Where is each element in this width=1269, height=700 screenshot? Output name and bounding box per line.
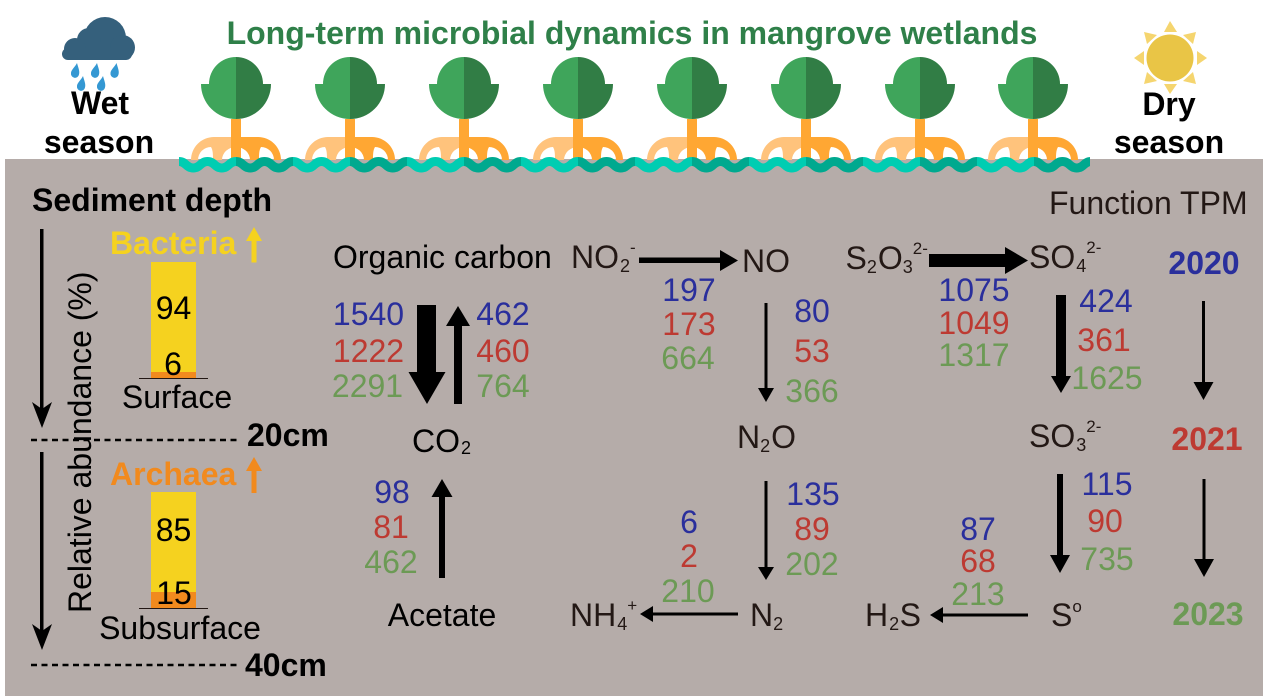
values: S0 to H2S: 213 [951, 576, 1005, 612]
stacked bar: subsurface: Subsurface [99, 610, 261, 646]
label: S2O3 2-: S [846, 240, 867, 276]
label: H2S: 2 [889, 614, 899, 634]
stacked bar: surface [122, 262, 232, 415]
label: S0: o [1072, 597, 1082, 616]
values: CO2 to organic carbon: 764 [476, 368, 530, 404]
label: N2: 2 [773, 614, 783, 634]
panel: sediment background [5, 159, 1263, 696]
label: SO3 2-: 2- [1086, 417, 1101, 436]
label: wet season [44, 85, 154, 160]
label: CO2: CO [412, 423, 460, 459]
values: CO2 to organic carbon: 462 [476, 296, 530, 332]
values: SO3 to S0: 115 [1081, 466, 1133, 502]
values: N2 to NH4+: 6 [680, 504, 698, 540]
nitrogen pathway [570, 238, 840, 634]
icon: sun [1134, 21, 1207, 94]
values: NO2- to NO: 173 [662, 306, 716, 342]
label: NH4+: NH [570, 597, 616, 633]
label: NO: NO [742, 243, 790, 279]
label: S0: S [1051, 597, 1072, 633]
values: SO4 to SO3: 1625 [1071, 360, 1143, 396]
label: SO3 2-: 3 [1076, 435, 1086, 455]
values: S2O3 to SO4 [938, 272, 1010, 373]
stacked bar: subsurface [99, 492, 261, 646]
legend: years timeline [1168, 245, 1244, 632]
arrow: NO2- to NO [639, 250, 738, 271]
values: organic carbon to CO2 [332, 296, 404, 404]
label: NH4+: 4 [617, 614, 627, 634]
label: S2O3 2-: 3 [903, 257, 913, 277]
stacked bar: subsurface: 15 [156, 575, 192, 611]
heading: function TPM: Function TPM [1049, 185, 1248, 221]
arrow: CO2 to organic carbon [446, 306, 470, 404]
label: N2O: O [771, 419, 796, 455]
label: H2S: H [865, 597, 888, 633]
label: SO3 2-: SO [1029, 418, 1075, 454]
values: N2O to N2: 89 [794, 511, 830, 547]
values: N2 to NH4+: 210 [661, 573, 715, 609]
year 2023: 2023 [1172, 596, 1244, 632]
values: SO4 to SO3: 424 [1079, 283, 1133, 319]
values: organic carbon to CO2: 1540 [333, 296, 404, 332]
label: dry season: Dry [1142, 86, 1196, 122]
values: acetate to CO2: 81 [373, 509, 409, 545]
values: organic carbon to CO2: 1222 [333, 333, 404, 369]
arrow: S0 to H2S [930, 607, 1028, 623]
values: SO4 to SO3: 361 [1077, 322, 1131, 358]
values: S0 to H2S: 87 [960, 511, 996, 547]
title: Long-term microbial dynamics in mangrove wetlands [227, 15, 1037, 51]
icon: rain cloud [62, 17, 135, 91]
values: S2O3 to SO4: 1075 [938, 272, 1010, 308]
label: organic carbon: Organic carbon [333, 239, 552, 275]
values: SO3 to S0: 735 [1080, 541, 1134, 577]
label: N2: N [750, 597, 773, 633]
carbon pathway [332, 239, 552, 633]
values: NO to N2O: 53 [794, 333, 830, 369]
arrow: N2O to N2 [758, 481, 774, 580]
arrow: S2O3 to SO4 [929, 247, 1028, 274]
values: N2O to N2: 135 [786, 476, 840, 512]
label: SO4 2-: 4 [1076, 256, 1086, 276]
arrow: N2 to NH4+ [640, 606, 738, 622]
label: archaea with up arrow: Archaea [110, 456, 236, 492]
values: NO to N2O [785, 293, 839, 409]
stacked bar: surface: 6 [164, 346, 182, 382]
values: S2O3 to SO4: 1317 [938, 337, 1010, 373]
label: 40cm: 40cm [245, 647, 327, 683]
arrow: depth to 40cm [32, 452, 52, 650]
label: S2O3 2-: 2- [913, 239, 928, 258]
values: NO2- to NO: 197 [662, 272, 716, 308]
stacked bar: surface: 94 [156, 290, 191, 326]
axis label: relative abundance: Relative abundance (%) [62, 271, 98, 613]
label: SO4 2-: 2- [1086, 238, 1101, 257]
values: CO2 to organic carbon [476, 296, 530, 404]
arrow: SO3 to S0 [1050, 474, 1070, 573]
values: CO2 to organic carbon: 460 [476, 333, 530, 369]
label: SO4 2-: SO [1029, 239, 1075, 275]
values: SO3 to S0 [1080, 466, 1134, 577]
water waves [179, 155, 1090, 174]
label: H2S: S [900, 597, 921, 633]
arrow: 2021 to 2023 [1194, 479, 1214, 577]
values: N2 to NH4+: 2 [680, 538, 698, 574]
label: NO2-: NO [571, 239, 619, 275]
label: S2O3 2-: 2 [867, 257, 877, 277]
label: wet season: season [44, 124, 154, 160]
label: acetate: Acetate [388, 597, 496, 633]
label: dry season: season [1114, 124, 1224, 160]
arrow: organic carbon to CO2 [408, 305, 446, 404]
arrow: depth to 20cm [32, 229, 52, 428]
dashed line: 20cm [31, 439, 240, 441]
label: N2O: 2 [760, 436, 770, 456]
values: organic carbon to CO2: 2291 [332, 368, 403, 404]
values: NO2- to NO: 664 [661, 340, 715, 376]
arrow: acetate to CO2 [432, 479, 452, 578]
heading: sediment depth: Sediment depth [32, 182, 272, 218]
label: NO2-: 2 [620, 256, 630, 276]
sulfur pathway [846, 238, 1143, 634]
values: NO to N2O: 80 [794, 293, 830, 329]
arrow: SO4 to SO3 [1051, 295, 1071, 393]
year 2020: 2020 [1168, 245, 1240, 281]
label: dry season [1114, 86, 1224, 160]
label: NO2-: - [630, 238, 636, 257]
values: SO4 to SO3 [1071, 283, 1143, 396]
values: NO to N2O: 366 [785, 373, 839, 409]
values: S0 to H2S: 68 [960, 543, 996, 579]
values: N2 to NH4+ [661, 504, 715, 609]
label: N2O: N [737, 419, 760, 455]
values: acetate to CO2: 462 [364, 544, 418, 580]
stacked bar: subsurface: 85 [156, 512, 191, 548]
values: N2O to N2: 202 [785, 546, 839, 582]
label: 20cm: 20cm [247, 417, 329, 453]
values: NO2- to NO [661, 272, 716, 376]
arrow: 2020 to 2021 [1194, 301, 1214, 400]
label: wet season: Wet [71, 85, 129, 121]
values: N2O to N2 [785, 476, 840, 582]
values: acetate to CO2: 98 [374, 474, 410, 510]
label: NH4+: + [627, 596, 637, 615]
label: S2O3 2-: O [878, 240, 903, 276]
arrow: NO to N2O [758, 303, 774, 402]
dashed line: 40cm [31, 664, 240, 666]
values: S0 to H2S [951, 511, 1005, 612]
values: SO3 to S0: 90 [1087, 503, 1123, 539]
values: acetate to CO2 [364, 474, 418, 580]
label: CO2: 2 [461, 438, 471, 458]
label: bacteria with up arrow: Bacteria [110, 225, 236, 261]
values: S2O3 to SO4: 1049 [938, 305, 1010, 341]
stacked bar: surface: Surface [122, 379, 232, 415]
mangrove trees row [191, 57, 1078, 160]
year 2021: 2021 [1171, 421, 1243, 457]
